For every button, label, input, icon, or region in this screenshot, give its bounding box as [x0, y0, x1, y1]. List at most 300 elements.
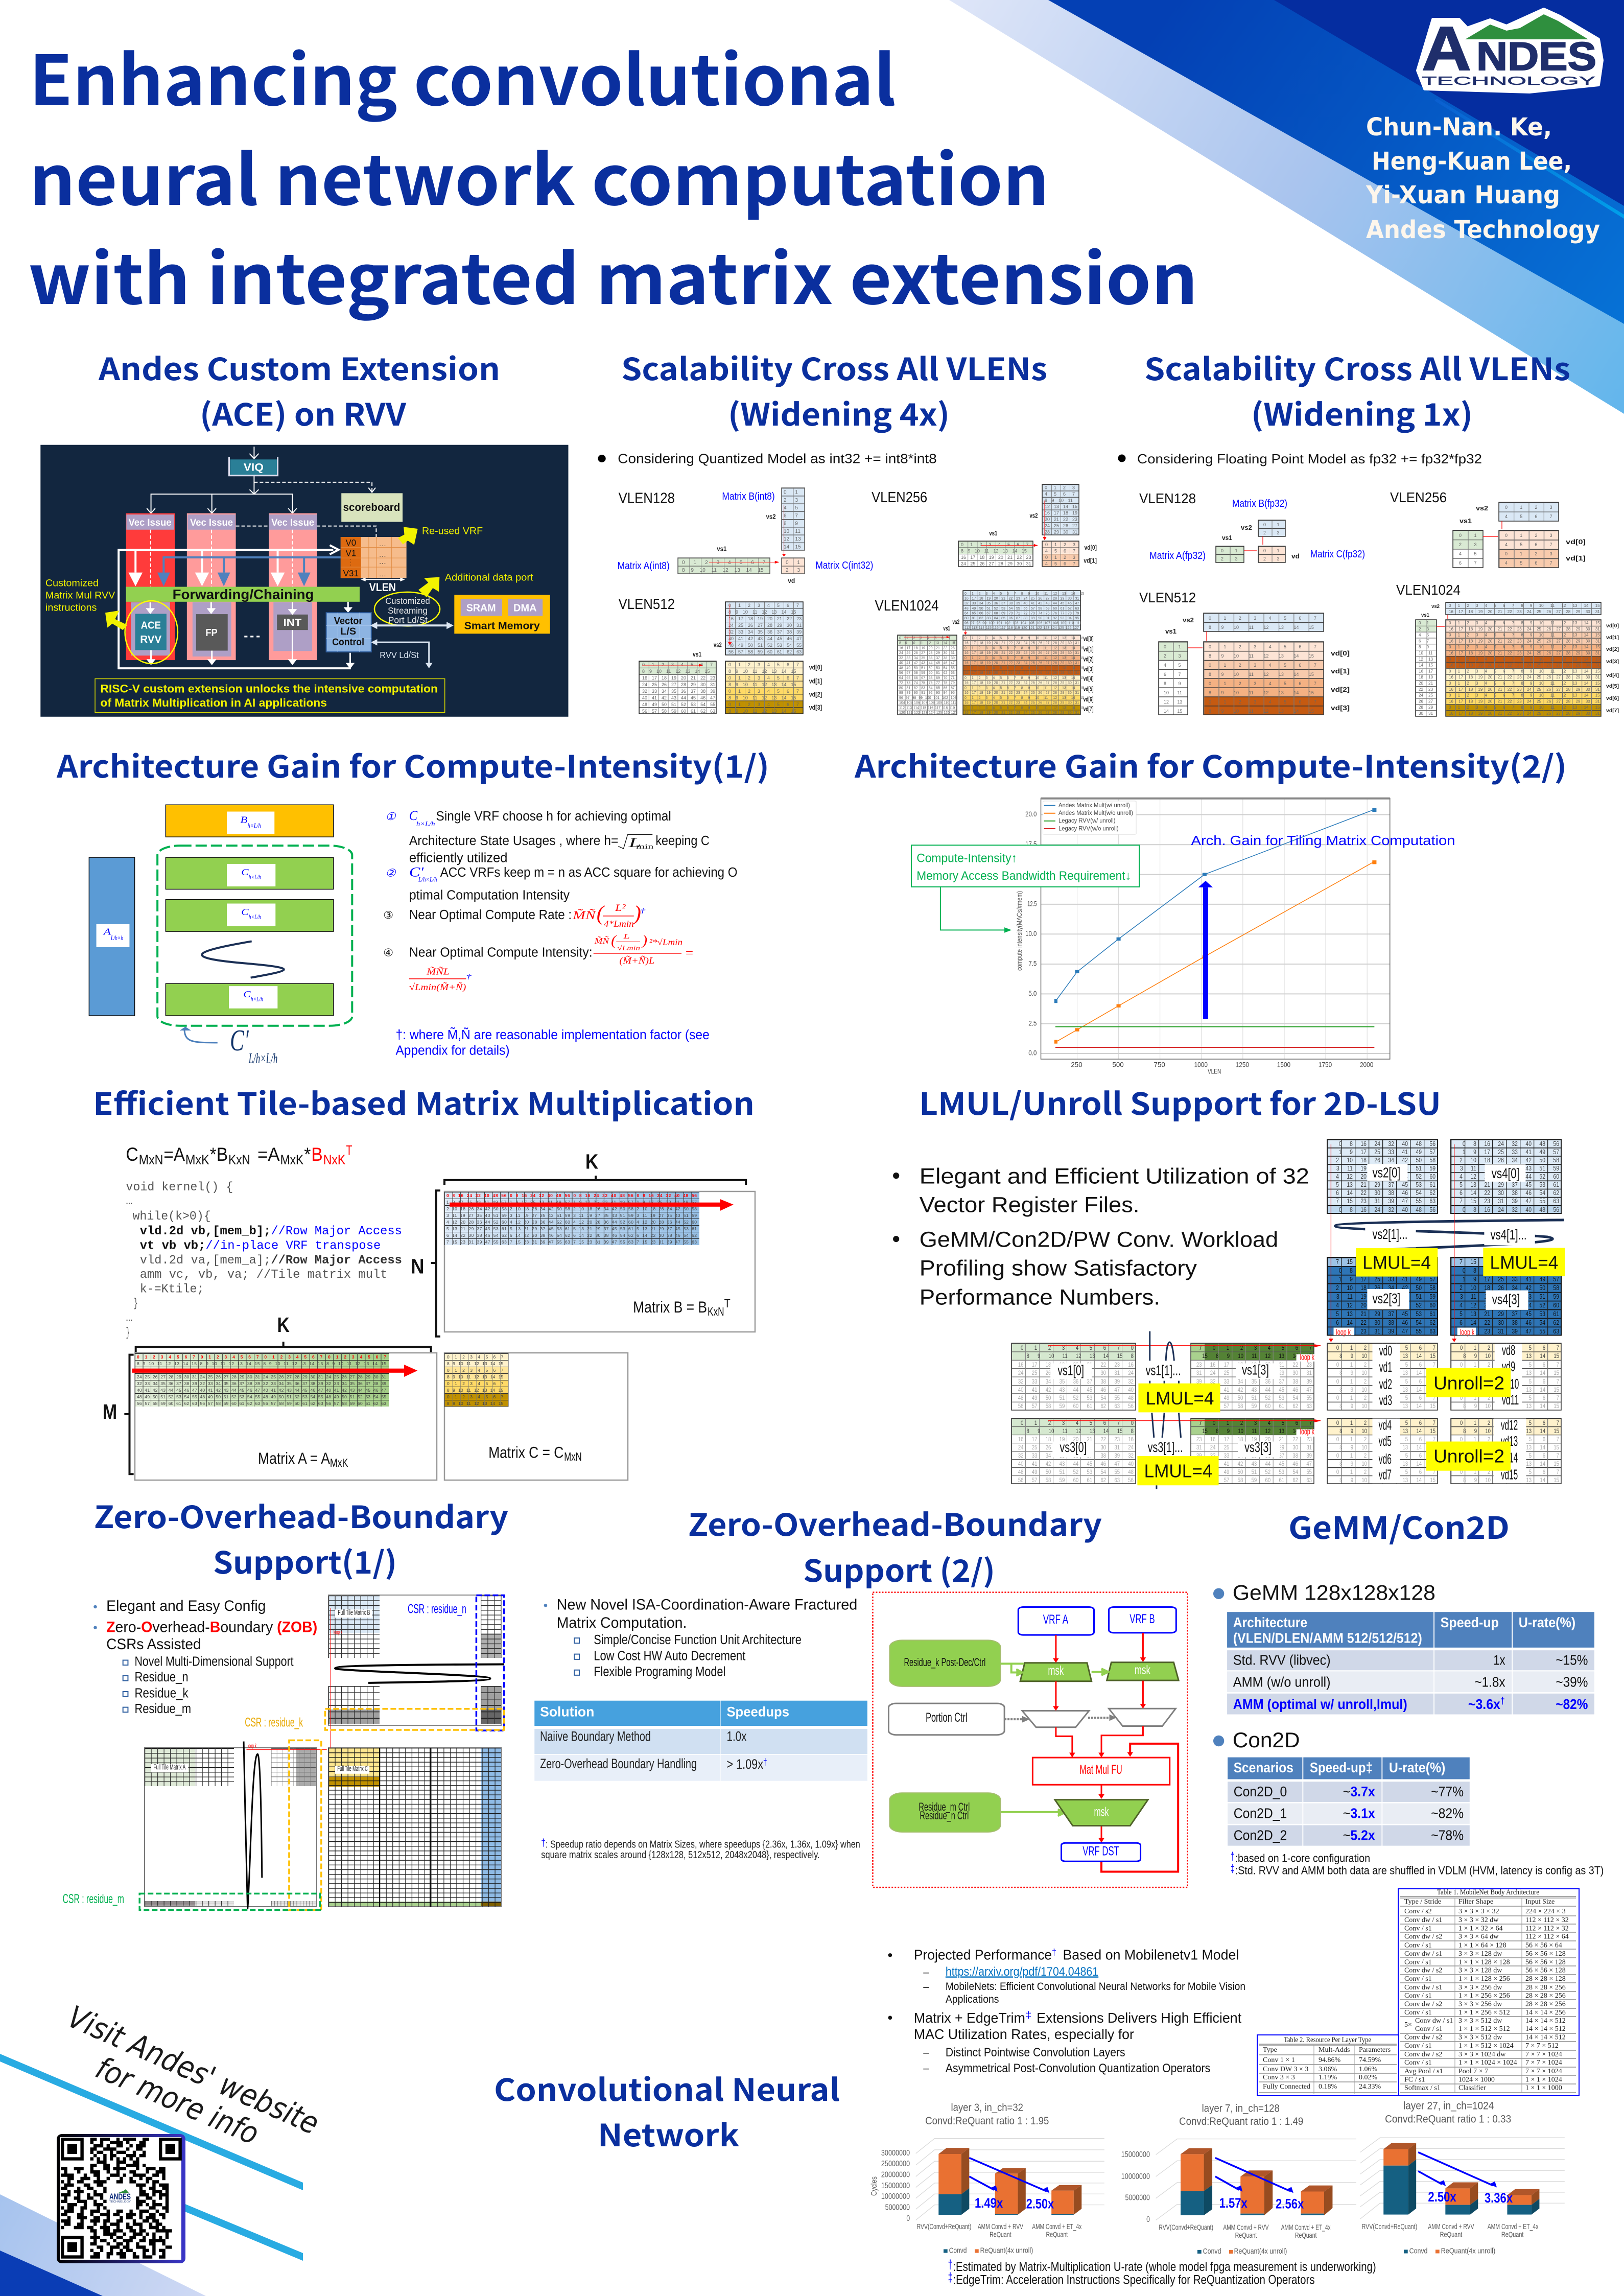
ZOB annotations: Novel Multi-Dimensional Support: [134, 1654, 294, 1669]
vs4 lower register grid: [1451, 1257, 1561, 1336]
red fractions: (M̃+Ñ)L: [619, 955, 654, 966]
vs3[0] register grid: 24 25 26 27 28 29 30 31 24: [1018, 1444, 1134, 1451]
VLEN1024 Matrix A grid: 32 33 34 35 36 37 38 39: [899, 657, 955, 660]
LMUL annotations and bullet text: Unroll=2: [1433, 1373, 1504, 1393]
Matrix A tile grid: 56 57 58 59 60 61 62 63 56 57 58 59 60 61 62 63 56 57 58 59 60 61 62 63 56 57 58 59 60 61 62 63: [137, 1401, 386, 1406]
VLEN512 grids: 0 1 2 3 4 5 6 7: [1209, 681, 1316, 686]
vector register names: vd8: [1502, 1343, 1515, 1358]
Matrix A tile grid: 16 17 18 19 20 21 22 23 16 17 18 19 20 21 22 23 16 17 18 19 20 21 22 23 16 17 18 19 20 21 22 23: [137, 1368, 386, 1373]
vs1[0] register grid: 32 33 34 35 36 37 38 39 32: [1018, 1378, 1134, 1385]
Matrix B tile grid: 0 8 16 24 32 40 48 56 0 8 16 24 32 40 48 56 0 8 16 24 32 40 48 56 0 8 16 24 32 40 48 56: [446, 1193, 697, 1198]
vs2 lower register grid: 5 13 21 29 37 45 53 61: [1336, 1310, 1435, 1318]
VLEN1024 Matrix C grid: 0 1 2 3 4 5 6 7 8 9 10 11 12 13 14 15: [964, 666, 1084, 670]
LMUL annotations and bullet text: LMUL=4: [1490, 1252, 1558, 1273]
VLEN256 grids: 4 5 6 7: [1505, 542, 1552, 547]
vs1[3] register grid: [1191, 1343, 1314, 1410]
VLEN1024 Matrix A grid: 56 57 58 59 60 61 62 63: [899, 671, 955, 675]
panel: MobileNet body architecture table: Table 1. MobileNet Body Architecture: [1437, 1888, 1539, 1896]
table: solution speedups: > 1.09x: [726, 1756, 763, 1772]
panel: MobileNet body architecture table: 1 × 1 × 256 × 256: [1458, 1992, 1510, 2000]
Matrix A brace and arrow: MxK: [330, 1456, 348, 1469]
Mat Mul FU node: [1032, 1758, 1170, 1785]
formula: C: [126, 1144, 138, 1165]
VLEN1024 Matrix B grid: 80 81 82 83 84 85 86 87 88 89 90 91 92 93 94 95: [964, 617, 1079, 620]
VLEN1024 grids: 26 27: [1419, 699, 1433, 704]
VLEN128 grids: 0 1: [1263, 522, 1280, 527]
caption box: [95, 679, 445, 713]
customized streaming port: Customized: [385, 596, 430, 606]
Matrix C frame: [444, 1353, 628, 1480]
line chart: compute intensity vs VLEN: Andes Matrix Mult(w/ unroll): [1058, 802, 1130, 809]
output msk trapezoid: msk: [1094, 1805, 1109, 1819]
VRF register file: ⋮: [350, 558, 352, 567]
vs3[0] register grid: 40 41 42 43 44 45 46 47 40: [1018, 1461, 1134, 1467]
VLEN512 Matrix B grid: 8 9 10 11 12 13 14 15: [728, 610, 796, 615]
VLEN512 grids: 0 1 2 3 4 5 6 7: [1209, 699, 1316, 705]
VLEN1024 grids: 16 17 18 19 20 21 22 23 24 25 26 27 28 29 30 31: [1449, 651, 1600, 655]
vector register names: vs1[0]: [1057, 1363, 1084, 1378]
chart 1: layer 3: Convd: [949, 2246, 967, 2255]
LMUL annotations and bullet text: [893, 1144, 1565, 1489]
ZOB bullet list: [93, 1598, 317, 1716]
flow diagram: Residue_k Post-Dec/Ctrl: [904, 1656, 985, 1669]
msk trapezoids top: [1020, 1662, 1179, 1681]
chart 1: layer 3: 30000000: [881, 2148, 910, 2158]
VLEN128 Matrix C grid: [782, 558, 805, 574]
vector register names: vd2: [1379, 1376, 1392, 1392]
labels and arrows for 4x widening: vd[2]: [809, 691, 822, 698]
chart 1: layer 3: 10000000: [881, 2192, 910, 2201]
labels and arrows for 1x widening: vd[6]: [1606, 696, 1619, 701]
labels and arrows for 4x widening: vs1: [989, 529, 997, 537]
formula text: ④: [383, 947, 393, 958]
VLEN1024 Matrix B grid: 16 17 18 19 20 21 22 23 24 25 26 27 28 29 30 31: [964, 597, 1079, 601]
GeMM section: GeMM 128x128x128: [1233, 1581, 1435, 1604]
chart 2: layer 7: RVV(Convd+ReQuant): [1159, 2223, 1213, 2232]
visit website callout: Visit Andes' website: [62, 1999, 324, 2142]
visit website callout: for more info: [90, 2050, 264, 2152]
Vector L/S Control: Vector: [334, 615, 363, 626]
vs2 top register grid: 4 12 20 28 36 44 52 60: [1336, 1173, 1435, 1180]
white register labels: [1050, 1164, 1535, 1483]
bullet list: GeMM/Con2D/PW Conv. Workload: [920, 1227, 1278, 1252]
speedup footnote: †: [541, 1837, 546, 1848]
VLEN1024 Matrix A grid: 72 73 74 75 76 77 78 79: [899, 682, 955, 685]
vs1[3] register grid: 15 8 9 10 11 12 13 14 15: [1202, 1353, 1312, 1360]
labels and arrows for 1x widening: vs1: [1460, 517, 1472, 525]
red fractions: √Lmin: [617, 944, 640, 952]
smart memory: DMA: [513, 602, 536, 614]
vd12-15 register grid: 0 1 2 3 4 5 6 7: [1460, 1452, 1559, 1459]
VRF register file: V31: [343, 568, 359, 578]
VRF tile diagram: [89, 805, 352, 1066]
projected performance bullet list: Applications: [946, 1994, 999, 2005]
labels and arrows for 1x widening: Matrix C(fp32): [1310, 549, 1365, 560]
text: vd[7]: [1084, 705, 1094, 713]
table: GeMM results: Speed-up: [1441, 1614, 1499, 1630]
panel: MobileNet body architecture table: 28 × 28 × 128: [1525, 1975, 1566, 1983]
panel: MobileNet body architecture table: 3 × 3 × 256 dw: [1458, 1984, 1502, 1992]
Matrix C tile grid: [444, 1353, 508, 1407]
chart 1: layer 3: 15000000: [881, 2181, 910, 2190]
panel: convolutional neural network results: [881, 1947, 1565, 2287]
chart 2: layer 7: 0: [1146, 2215, 1150, 2224]
vs1[3] register grid: 47 40 41 42 43 44 45 46 47: [1196, 1387, 1312, 1393]
execution columns: Vec Issue: [271, 517, 314, 528]
heading: Convolutional Neural Network: Convolutional Neural: [494, 2066, 840, 2110]
panel: MobileNet body architecture table: Conv dw / s2: [1404, 2033, 1442, 2042]
projected performance bullet list: Projected Performance: [914, 1947, 1052, 1963]
vs4 top register grid: 6 14 22 30 38 46 54 62: [1460, 1189, 1559, 1197]
performance footnotes: †: [948, 2258, 952, 2271]
Residue_k control node: [889, 1640, 1000, 1686]
panel: LMUL and unroll support: [893, 1139, 1565, 1489]
VRF tile diagram: A: [103, 926, 111, 937]
VIQ block: VIQ: [244, 461, 264, 473]
panel: MobileNet body architecture table: 1 × 1 × 1000: [1525, 2084, 1562, 2092]
chart 2: layer 7: 5000000: [1125, 2193, 1150, 2202]
text: Near Optimal Compute Rate :: [409, 907, 572, 922]
VRF DST node: VRF DST: [1082, 1844, 1119, 1858]
code listing: vld.2d vb,[mem_b];//Row Major Access: [140, 1224, 402, 1238]
caption box: of Matrix Multiplication in AI applications: [100, 697, 327, 709]
bullet list: Profiling show Satisfactory: [920, 1256, 1197, 1280]
GeMM and Con2D footnotes: :based on 1-core configuration: [1235, 1852, 1370, 1864]
vector register names: vs3[1]...: [1148, 1440, 1183, 1455]
vs3[3] register grid: 7 0 1 2 3 4 5 6 7: [1199, 1420, 1312, 1426]
labels and arrows for 1x widening: vd: [1291, 552, 1300, 560]
vs3[3] register grid: 55 48 49 50 51 52 53 54 55: [1196, 1469, 1312, 1475]
VLEN1024 Matrix A grid: 96 97 98 99 100 101 102 103: [899, 696, 957, 700]
code listing: }: [134, 1296, 138, 1310]
table: solution speedups: Naiive Boundary Method: [540, 1729, 651, 1744]
table: solution speedups: Solution: [540, 1704, 594, 1720]
loop k labels and red scan lines: loop k: [1300, 1353, 1314, 1362]
VLEN1024 grids: 16 17: [1419, 669, 1433, 673]
VLEN128 Matrix B grid: [782, 488, 805, 550]
VRF tile diagram: h×L/h: [251, 995, 263, 1002]
VRF tile diagram: L/h×h: [111, 934, 123, 942]
LMUL annotations and bullet text: Unroll=2: [1433, 1446, 1504, 1466]
panel: MobileNet body architecture table: 1 × 1 × 128 × 128: [1458, 1958, 1510, 1966]
Matrix C tile grid: 8 9 10 11 12 13 14 15: [447, 1374, 503, 1379]
chart y axis label: compute intensity(MACs/#mem): [1015, 891, 1023, 971]
line chart: compute intensity vs VLEN: 2000: [1360, 1061, 1373, 1069]
panel: MobileNet body architecture table: 112 × 112 × 32: [1525, 1925, 1569, 1932]
vs3[3] register grid: 47 40 41 42 43 44 45 46 47: [1196, 1461, 1312, 1467]
VLEN1024 grids: 0 1 2 3 4 5 6 7 8 9 10 11 12 13 14 15: [1449, 669, 1600, 673]
vs2 top register grid: 5 13 21 29 37 45 53 61: [1336, 1181, 1435, 1188]
LMUL annotations and bullet text: vd12: [1501, 1417, 1518, 1433]
Matrix B brace and arrow: [411, 1150, 746, 1337]
VLEN1024 Matrix A grid: 64 65 66 67 68 69 70 71: [899, 676, 955, 680]
LMUL annotations and bullet text: vd15: [1501, 1467, 1518, 1483]
VLEN512 grids: 4 5: [1164, 663, 1181, 668]
heading: Efficient Tile-based Matrix Multiplication: Efficient Tile-based Matrix Multiplication: [93, 1080, 755, 1124]
formula text: L/h×L/h: [418, 876, 437, 883]
vector register names: vd6: [1379, 1451, 1392, 1467]
background: bright accent stripe: [1434, 99, 1624, 219]
panel: resource per layer type table: Conv DW 3 × 3: [1263, 2066, 1308, 2073]
line chart: compute intensity vs VLEN: 5.0: [1028, 990, 1037, 997]
performance footnotes: ‡: [948, 2270, 952, 2284]
VLEN512 grids: 6 7: [1164, 672, 1181, 677]
VLEN256 Matrix B grid: 24 25 26 27: [1045, 523, 1077, 528]
table: solution speedups: Zero-Overhead Boundary Handling: [540, 1756, 697, 1771]
bullet list: Elegant and Efficient Utilization of 32: [920, 1164, 1309, 1188]
table: Con2D results: ~77%: [1431, 1784, 1464, 1799]
table: Con2D results: Con2D_1: [1234, 1805, 1287, 1821]
vs4 lower register grid: 3 11 19 27 35 43 51 59: [1460, 1293, 1559, 1300]
VLEN1024 Matrix A grid: 48 49 50 51 52 53 54 55: [899, 666, 955, 670]
labels and arrows for 1x widening: vs1: [1165, 627, 1176, 635]
vs3[0] register grid: 16 17 18 19 20 21 22 23 16: [1018, 1436, 1134, 1443]
VLEN128 Matrix A grid: 8 9 10 11 12 13 14 15: [682, 568, 764, 573]
fold curves between vs1 and vs3: [1150, 1331, 1181, 1489]
customized streaming port: Port Ld/St: [388, 615, 428, 625]
red fractions: †: [640, 907, 646, 915]
labels and arrows for 4x widening: VLEN512: [619, 596, 675, 612]
vs1[0] register grid: 48 49 50 51 52 53 54 55 48: [1018, 1395, 1134, 1401]
VLEN512 Matrix C grid: 8 9 10 11 12 13 14 15: [728, 709, 796, 714]
scoreboard: [341, 493, 403, 522]
vs4 top register grid: 0 8 16 24 32 40 48 56: [1463, 1140, 1559, 1147]
ISA bullet list: Simple/Concise Function Unit Architecture: [594, 1632, 802, 1647]
Matrix C tile grid: 8 9 10 11 12 13 14 15: [447, 1361, 503, 1366]
labels and arrows for 1x widening: vd[7]: [1606, 708, 1619, 714]
vd0-3 register grid: 0 1 2 3 4 5 6 7: [1336, 1395, 1435, 1401]
vd12-15 register grid: 0 1 2 3 4 5 6 7: [1460, 1469, 1559, 1475]
CSR residue_m: CSR : residue_m: [63, 1892, 124, 1906]
formula text: h×L/h: [416, 820, 435, 827]
panel: MobileNet body architecture table: Conv / s2: [1404, 1908, 1432, 1915]
yellow callouts: Additional data port: [445, 572, 533, 583]
panel: MobileNet body architecture table: Conv / s1: [1404, 1925, 1432, 1932]
ZOB annotations: [63, 1595, 504, 1910]
red fractions: [409, 901, 694, 992]
labels and arrows for 1x widening: vd[2]: [1331, 686, 1350, 693]
chart 1: layer 3: Convd:ReQuant ratio 1 : 1.95: [925, 2115, 1049, 2127]
title: Enhancing convolutional: [29, 25, 896, 125]
VLEN1024 Matrix B grid: 112 113 114 115 116 117 118 119 120 121 122 123 124 125 126 127: [964, 626, 1079, 630]
VRF A node: [1018, 1607, 1094, 1635]
loop k markers: [246, 1608, 342, 1750]
VLEN512 Matrix A grid: [639, 661, 716, 714]
vector register names: vd0: [1379, 1343, 1392, 1359]
QR center Andes logo: [109, 2189, 131, 2204]
panel: resource per layer type table: 1.06%: [1359, 2066, 1377, 2073]
panel: resource per layer type table: Type: [1263, 2046, 1277, 2054]
VLEN256 Matrix A grid: 24 25 26 27 28 29 30 31: [961, 561, 1031, 566]
vs2 top register grid: 1 9 17 25 33 41 49 57: [1339, 1149, 1435, 1156]
vd4-7 register grid: 0 1 2 3 4 5 6 7: [1336, 1420, 1435, 1426]
VLEN512 grids: 0 1 2 3 4 5 6 7: [1209, 644, 1316, 649]
panel: MobileNet body architecture table: 28 × 28 × 256: [1525, 1984, 1566, 1992]
vs2 lower register grid: 3 11 19 27 35 43 51 59: [1336, 1293, 1435, 1300]
chart 3: layer 27: Convd: [1409, 2246, 1427, 2255]
vs2 lower register grid: 7 15 23 31 39 47 55 63: [1336, 1258, 1435, 1266]
vs3[0] register grid: 32 33 34 35 36 37 38 39 32: [1018, 1452, 1134, 1459]
vs2 top register grid: 0 8 16 24 32 40 48 56: [1339, 1140, 1435, 1147]
panel: convolutional neural network results: Based on Mobilenetv1 Model: [1063, 1947, 1239, 1963]
formula text: min: [636, 843, 653, 850]
VLEN512 Matrix A grid: 0 1 2 3 4 5 6 7: [642, 662, 713, 667]
vd0-3 register grid: 8 9 10 11 12 13 14 15: [1339, 1370, 1435, 1376]
Forwarding/Chaining bar: [126, 587, 360, 602]
Matrix B tile grid: 5 13 21 29 37 45 53 61 5 13 21 29 37 45 53 61 5 13 21 29 37 45 53 61 5 13 21 29 37 45 53 61: [446, 1226, 697, 1231]
vd12-15 register grid: 8 9 10 11 12 13 14 15: [1463, 1428, 1559, 1435]
VLEN1024 Matrix B grid: 48 49 50 51 52 53 54 55 56 57 58 59 60 61 62 63: [964, 607, 1079, 611]
panel: architecture gain 1 diagram and formulas: [89, 805, 738, 1066]
panel: MobileNet body architecture table: 14 × 14 × 512: [1525, 2033, 1566, 2042]
VLEN128 Matrix B grid: 14 15: [784, 544, 801, 550]
panel: MobileNet body architecture table: Conv / s1: [1404, 2009, 1432, 2017]
QR center Andes logo: ANDES: [109, 2192, 131, 2201]
QR code: [57, 2134, 185, 2263]
labels and arrows for 1x widening: vs2: [1476, 504, 1488, 512]
CSR residue_m: [63, 1892, 320, 1910]
heading: LMUL/Unroll Support: LMUL/Unroll Support for 2D-LSU: [919, 1080, 1441, 1124]
LMUL annotations and bullet text: vd13: [1501, 1434, 1518, 1449]
VLEN128 grids: 2 3: [1263, 556, 1280, 561]
formula text: L: [628, 835, 641, 850]
VLEN512 grids: [1159, 613, 1324, 715]
Matrix B tile grid: 2 10 18 26 34 42 50 58 2 10 18 26 34 42 50 58 2 10 18 26 34 42 50 58 2 10 18 26 34 42 50 58: [446, 1206, 697, 1211]
line chart: compute intensity vs VLEN: [911, 798, 1455, 1075]
VLEN256 grids: 0 1 2 3: [1505, 551, 1552, 556]
panel: architecture gain 1 diagram and formulas: ²*√Lmin: [649, 938, 682, 947]
VRF tile diagram: C: [241, 867, 249, 877]
VRF tile diagram: B: [240, 814, 248, 825]
labels and arrows for 4x widening: vs1: [717, 545, 726, 552]
table: solution speedups: 1.0x: [726, 1729, 747, 1744]
vector register names: vd3: [1379, 1393, 1392, 1408]
VLEN256 grids: 4 5 6 7: [1505, 514, 1552, 519]
tile labels: [151, 1608, 372, 1774]
ZOB bullet list: Residue_m: [134, 1701, 191, 1716]
chart 2: layer 7: Convd:ReQuant ratio 1 : 1.49: [1179, 2116, 1303, 2127]
projected performance bullet list: Matrix + EdgeTrim: [914, 2010, 1025, 2026]
VLEN1024 Matrix C grid: 16 17 18 19 20 21 22 23 24 25 26 27 28 29 30 31: [964, 701, 1079, 705]
VLEN1024 grids: 8 9: [1419, 645, 1429, 649]
chart 2: layer 7: layer 7, in_ch=128: [1202, 2102, 1280, 2114]
vd12-15 register grid: 8 9 10 11 12 13 14 15: [1463, 1477, 1559, 1484]
vd0-3 register grid: 8 9 10 11 12 13 14 15: [1339, 1387, 1435, 1393]
Con2D section: Con2D: [1233, 1728, 1300, 1752]
vs2 top register grid: 3 11 19 27 35 43 51 59: [1336, 1165, 1435, 1172]
VLEN1024 grids: 0 1 2 3 4 5 6 7 8 9 10 11 12 13 14 15: [1449, 621, 1600, 625]
chart 3: layer 27: 3.36x: [1485, 2190, 1513, 2206]
panel: MobileNet body architecture table: 3 × 3 × 512 dw: [1458, 2017, 1502, 2025]
labels and arrows for 4x widening: vd: [788, 577, 795, 584]
labels and arrows for 4x widening: vs2: [766, 513, 776, 520]
Matrix B brace and arrow: N: [411, 1255, 424, 1278]
formula: MxK: [280, 1152, 303, 1167]
Matrix C tile grid: 0 1 2 3 4 5 6 7: [447, 1368, 504, 1373]
chart 2: layer 7: AMM Convd + RVV: [1223, 2223, 1269, 2232]
flow diagram: [873, 1592, 1188, 1887]
loop k labels and red scan lines: loop k: [1300, 1427, 1314, 1437]
formula text: [383, 808, 738, 959]
VLEN512 Matrix A grid: 16 17 18 19 20 21 22 23: [642, 675, 715, 681]
LMUL annotations and bullet text: vd11: [1502, 1392, 1519, 1408]
VLEN128 Matrix C grid: 0 1: [786, 560, 800, 566]
heading: Scalability widening 1x: Scalability Cross All VLENs: [1144, 345, 1570, 389]
vd8-11 register grid: 8 9 10 11 12 13 14 15: [1463, 1403, 1559, 1410]
VLEN width marker: VLEN: [369, 581, 396, 594]
chart 3: layer 27: ReQuant: [1501, 2231, 1524, 2239]
ZOB bullet list: Residue_n: [134, 1670, 189, 1684]
panel: MobileNet body architecture table: 7 × 7 × 1024: [1525, 2068, 1562, 2075]
labels and arrows for 1x widening: vd[1]: [1606, 635, 1619, 641]
Matrix A brace and arrow: [103, 1313, 431, 1474]
title: [28, 25, 1198, 324]
panel: MobileNet body architecture table: 14 × 14 × 256: [1525, 2009, 1566, 2017]
VLEN256 grids: [1453, 502, 1559, 568]
line chart: compute intensity vs VLEN: 7.5: [1028, 959, 1037, 968]
labels and arrows for 1x widening: vd[3]: [1331, 704, 1350, 712]
table: Con2D results: Speed-up‡: [1310, 1760, 1373, 1775]
VLEN256 Matrix A grid: 16 17 18 19 20 21 22 23: [961, 555, 1031, 560]
vd0-3 register grid: 8 9 10 11 12 13 14 15: [1339, 1403, 1435, 1410]
VRF register file: V0: [345, 537, 356, 548]
vs1[0] register grid: 8 9 10 11 12 13 14 15 8: [1027, 1353, 1134, 1360]
vs3[3] register grid: 39 32 33 34 35 36 37 38 39: [1196, 1452, 1312, 1459]
panel: MobileNet body architecture table: 1 × 1 × 32 × 64: [1458, 1925, 1503, 1932]
vd4-7 register grid: 0 1 2 3 4 5 6 7: [1336, 1436, 1435, 1443]
vs4 top register grid: 5 13 21 29 37 45 53 61: [1460, 1181, 1559, 1188]
VLEN1024 grids: 0 1 2 3 4 5 6 7 8 9 10 11 12 13 14 15: [1449, 693, 1600, 698]
panel: convolutional neural network results: Asymmetrical Post-Convolution Quantization Operators: [946, 2061, 1210, 2075]
table: Con2D results: ~78%: [1431, 1827, 1464, 1843]
table: solution speedups: [534, 1701, 867, 1781]
panel: MobileNet body architecture table: Conv / s1: [1404, 1992, 1432, 2000]
title: neural network computation: [29, 125, 1049, 225]
LMUL annotations and bullet text: LMUL=4: [1362, 1252, 1431, 1273]
panel: MobileNet body architecture table: 1 × 1 × 256 × 512: [1458, 2009, 1510, 2017]
heading: Scalability widening 4x: (Widening 4x): [728, 390, 950, 435]
panel: resource per layer type table: 74.59%: [1359, 2056, 1381, 2064]
panel: tile matrix multiplication: [103, 1142, 755, 1480]
vs2 top register grid: 0 8 16 24 32 40 48 56: [1339, 1206, 1435, 1213]
VLEN1024 grids: 16 17 18 19 20 21 22 23 24 25 26 27 28 29 30 31: [1449, 663, 1600, 668]
labels and arrows for 4x widening: vs2: [1029, 512, 1038, 519]
VLEN1024 Matrix C grid: 0 1 2 3 4 5 6 7 8 9 10 11 12 13 14 15: [964, 657, 1084, 660]
heading: Convolutional Neural Network: [494, 2066, 840, 2156]
smart memory: [454, 595, 550, 634]
scoreboard: scoreboard: [343, 501, 400, 513]
panel: MobileNet body architecture table: Classifier: [1458, 2084, 1486, 2092]
VLEN256 Matrix B grid: [1042, 484, 1079, 535]
yellow callouts: instructions: [45, 602, 97, 613]
Matrix B tile grid: 1 9 17 25 33 41 49 57 1 9 17 25 33 41 49 57 1 9 17 25 33 41 49 57 1 9 17 25 33 41 49 57: [446, 1200, 697, 1205]
green control arrows: [1000, 1664, 1109, 1816]
chart 2: layer 7: Convd: [1203, 2247, 1221, 2256]
formula, code and matrix labels: [103, 1142, 746, 1474]
panel: MobileNet body architecture table: 7 × 7 × 1024: [1525, 2059, 1562, 2067]
labels and arrows for 4x widening: Matrix B(int8): [722, 490, 775, 502]
vd8-11 register grid: 8 9 10 11 12 13 14 15: [1463, 1387, 1559, 1393]
Matrix B tile grid: 3 11 19 27 35 43 51 59 3 11 19 27 35 43 51 59 3 11 19 27 35 43 51 59 3 11 19 27 35 43 51 59: [446, 1213, 697, 1218]
vd12-15 register grid: 0 1 2 3 4 5 6 7: [1460, 1436, 1559, 1443]
matrix B residue grids: [327, 1595, 503, 1725]
panel: MobileNet body architecture table: 224 × 224 × 3: [1525, 1908, 1566, 1915]
vs2 lower register grid: [1327, 1257, 1438, 1336]
labels and arrows for 1x widening: Considering Floating Point Model as fp32 += fp32*fp32: [1137, 451, 1482, 466]
panel: architecture gain 2 line chart: [911, 798, 1455, 1075]
vs4 lower register grid: 6 14 22 30 38 46 54 62: [1460, 1319, 1559, 1326]
Matrix A tile grid: [135, 1353, 389, 1407]
